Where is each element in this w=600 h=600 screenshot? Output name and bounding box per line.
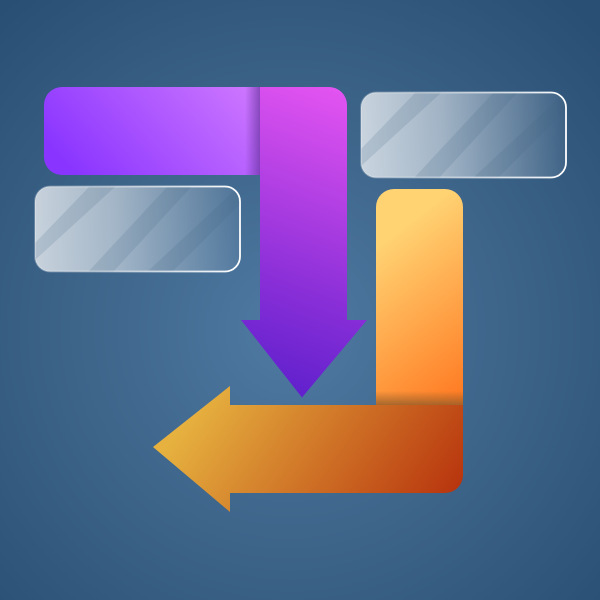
fold shadow (245, 87, 260, 175)
panel: orange arrow pointing left (153, 189, 463, 512)
glass panel: right (361, 92, 566, 178)
purple vertical arrow (241, 87, 367, 398)
orange vertical bar (376, 189, 463, 406)
orange horizontal arrow (153, 386, 463, 512)
purple horizontal bar (44, 87, 261, 175)
glass panel: left (35, 186, 240, 272)
panel: purple arrow pointing down (44, 87, 367, 398)
fold shadow (376, 391, 463, 405)
